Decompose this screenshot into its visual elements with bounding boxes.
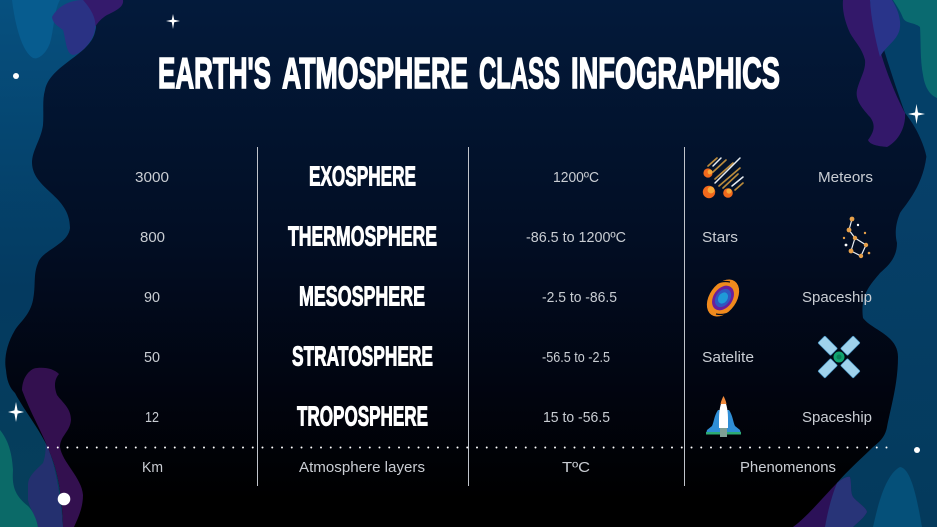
column: atmosphere layers — [288, 160, 437, 476]
column: phenomena labels: Spaceship — [802, 290, 872, 306]
title — [158, 49, 780, 98]
column: temperature: -86.5 to 1200ºC — [526, 230, 626, 246]
column: altitude in km — [135, 170, 169, 476]
column: atmosphere layers: Atmosphere layers — [299, 460, 425, 476]
column: phenomena labels: Phenomenons — [740, 460, 836, 476]
column: phenomena labels: Stars — [702, 230, 738, 246]
title: EARTH'S — [158, 49, 271, 98]
icon: constellation — [843, 217, 870, 258]
title: INFOGRAPHICS — [571, 49, 780, 98]
dotted baseline — [48, 446, 892, 448]
column: phenomena labels: Satelite — [702, 350, 754, 366]
column: phenomena labels — [702, 170, 873, 476]
column: altitude in km: Km — [142, 460, 163, 476]
right decorative blobs — [793, 0, 937, 527]
title: ATMOSPHERE — [282, 49, 468, 98]
column: temperature: 1200ºC — [553, 170, 599, 186]
column: atmosphere layers: THERMOSPHERE — [288, 220, 437, 252]
column: altitude in km: 12 — [145, 410, 159, 426]
column: atmosphere layers: STRATOSPHERE — [292, 340, 433, 372]
column: altitude in km: 800 — [140, 230, 165, 246]
title: CLASS — [479, 49, 560, 98]
icon: satellite — [804, 322, 874, 392]
column: temperature: -56.5 to -2.5 — [542, 350, 610, 366]
column: temperature: TºC — [562, 460, 590, 476]
table dividers — [258, 147, 684, 486]
column: altitude in km: 3000 — [135, 170, 169, 186]
icon: galaxy — [700, 273, 746, 323]
column: altitude in km: 90 — [144, 290, 160, 306]
column: atmosphere layers: TROPOSPHERE — [297, 400, 428, 432]
icon: meteors — [703, 158, 743, 198]
column: temperature — [526, 170, 626, 476]
column: phenomena labels: Spaceship — [802, 410, 872, 426]
column: temperature: 15 to -56.5 — [543, 410, 610, 426]
left decorative blobs — [0, 0, 123, 527]
column: altitude in km: 50 — [144, 350, 160, 366]
column: atmosphere layers: MESOSPHERE — [299, 280, 425, 312]
column: phenomena labels: Meteors — [818, 170, 873, 186]
column: atmosphere layers: EXOSPHERE — [309, 160, 416, 192]
icon: space shuttle — [706, 396, 741, 437]
column: temperature: -2.5 to -86.5 — [542, 290, 617, 306]
